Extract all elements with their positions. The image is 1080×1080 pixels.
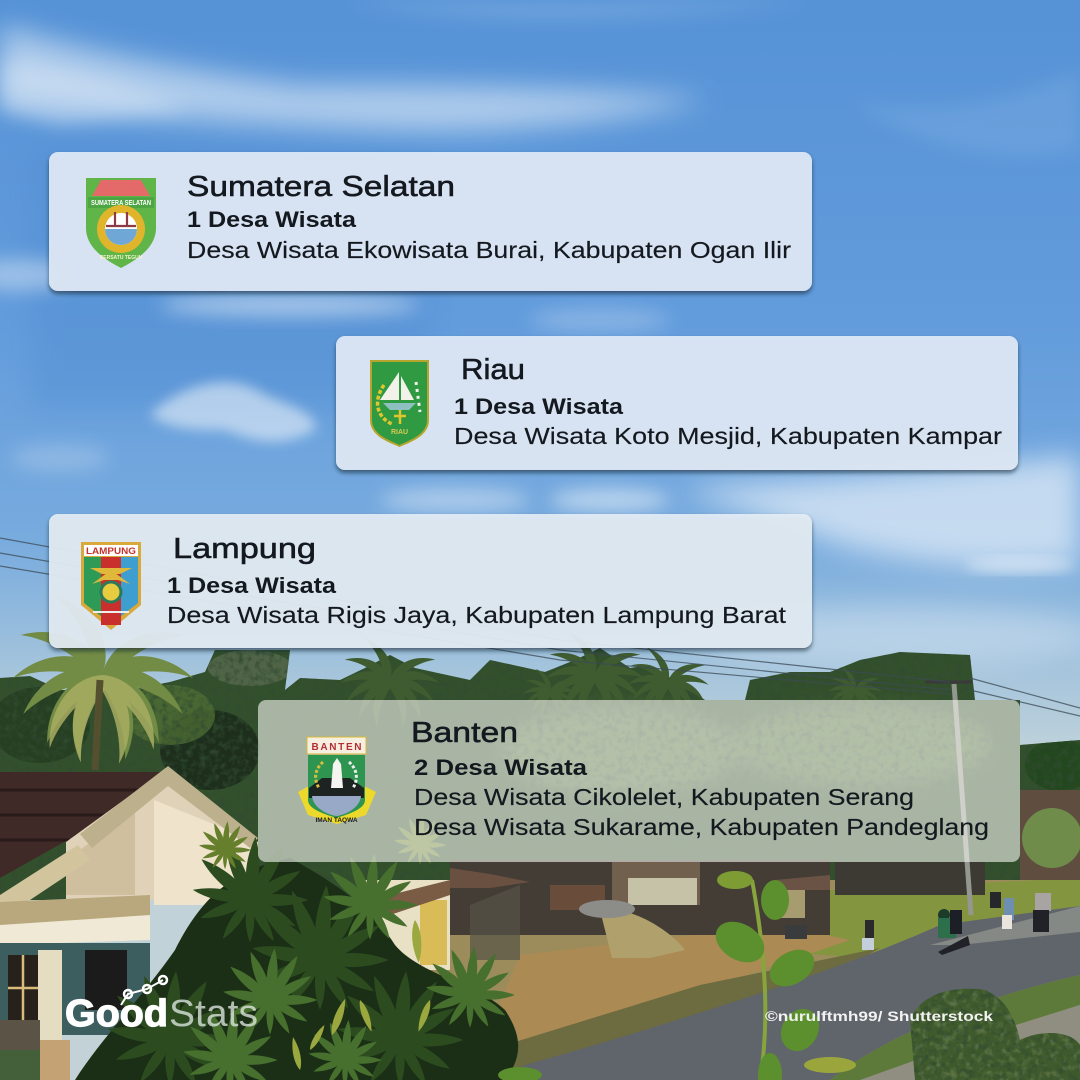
icon: Riau emblem: RIAU bbox=[391, 429, 408, 436]
motorbikes bbox=[785, 892, 1051, 955]
village list: Desa Wisata Rigis Jaya, Kabupaten Lampung Barat bbox=[167, 602, 787, 628]
province name: Riau bbox=[461, 354, 525, 386]
village list: Desa Wisata Ekowisata Burai, Kabupaten Ogan Ilir bbox=[187, 237, 791, 263]
icon: Lampung emblem: LAMPUNG bbox=[86, 546, 136, 557]
village count: 2 Desa Wisata bbox=[414, 755, 588, 780]
road bbox=[470, 906, 1080, 1080]
foreground sapling bbox=[708, 871, 856, 1080]
ground bbox=[430, 880, 1080, 1080]
logo: GoodStats bbox=[65, 976, 258, 1035]
province name: Banten bbox=[411, 717, 518, 749]
icon: Banten emblem: IMAN TAQWA bbox=[315, 817, 358, 824]
small house behind foliage bbox=[360, 880, 450, 970]
village list bbox=[414, 784, 989, 840]
province name: Sumatera Selatan bbox=[187, 171, 455, 203]
logo: GoodStats: Stats bbox=[169, 993, 258, 1035]
panel: Banten bbox=[258, 700, 1020, 862]
stilt houses bbox=[450, 860, 830, 935]
village list: Desa Wisata Koto Mesjid, Kabupaten Kampar bbox=[454, 423, 1002, 449]
tree line bbox=[0, 640, 1080, 900]
village list: Desa Wisata Cikolelet, Kabupaten Serang bbox=[414, 784, 914, 810]
village count: 1 Desa Wisata bbox=[187, 207, 357, 232]
icon: Lampung emblem bbox=[81, 542, 141, 630]
icon: Sumatera Selatan emblem bbox=[86, 178, 156, 268]
panel: Sumatera Selatan bbox=[49, 152, 812, 291]
foliage front bbox=[75, 816, 518, 1080]
photo credit: ©nurulftmh99/ Shutterstock bbox=[765, 1008, 993, 1024]
utility pole and wires bbox=[954, 684, 971, 915]
left house bbox=[0, 766, 258, 1080]
province name: Lampung bbox=[173, 533, 316, 565]
village list: Desa Wisata Sukarame, Kabupaten Pandeglang bbox=[414, 814, 989, 840]
panel: Lampung bbox=[49, 514, 812, 648]
icon: Banten emblem: BANTEN bbox=[312, 742, 362, 753]
icon: Sumatera Selatan emblem: BERSATU TEGUH bbox=[100, 255, 143, 261]
village count: 1 Desa Wisata bbox=[454, 394, 624, 419]
right bushes bbox=[910, 988, 1080, 1080]
village count: 1 Desa Wisata bbox=[167, 573, 337, 598]
icon: Riau emblem bbox=[371, 361, 428, 446]
icon: Sumatera Selatan emblem: SUMATERA SELATAN bbox=[91, 198, 151, 207]
panel: Riau bbox=[336, 336, 1018, 470]
icon: Banten emblem bbox=[298, 737, 376, 824]
logo: GoodStats: Good bbox=[65, 993, 168, 1035]
